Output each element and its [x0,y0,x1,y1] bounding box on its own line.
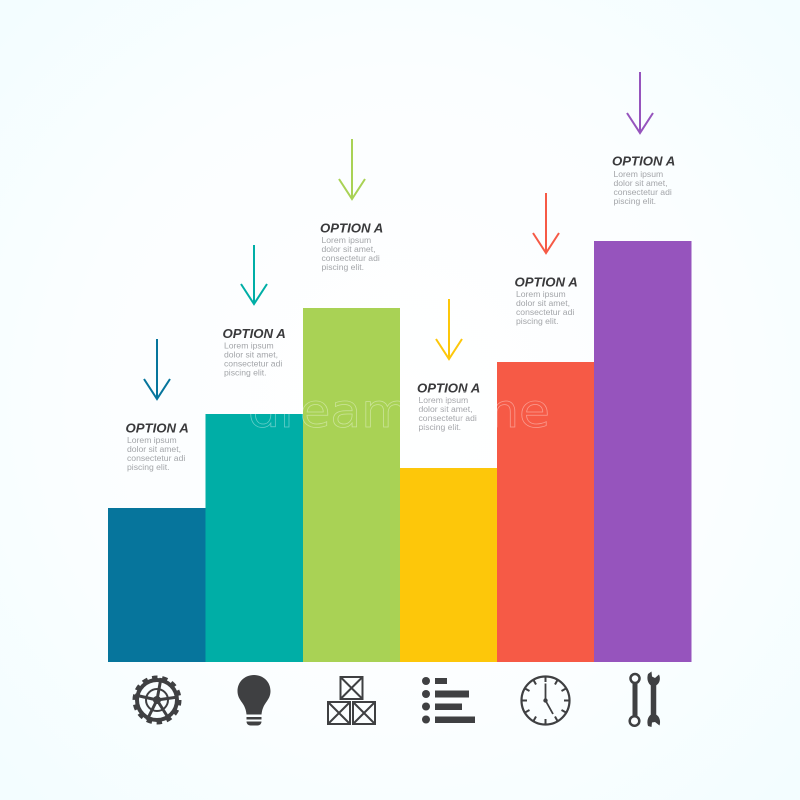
arrow: blue [144,339,170,399]
text block: option 4: consectetur adi [418,413,477,423]
text block: option 6: dolor sit amet, [614,178,667,188]
text block: option 5 [514,274,578,326]
text block: option 2: piscing elit. [224,368,267,378]
text block: option 1: piscing elit. [127,462,170,472]
text block: option 4: piscing elit. [418,422,461,432]
icon: list [422,677,475,724]
text block: option 2: OPTION A [222,326,286,341]
text block: option 2: consectetur adi [224,358,282,368]
text block: option 6: OPTION A [612,154,675,168]
text block: option 6: Lorem ipsum [614,169,663,179]
text block: option 2 [222,326,286,378]
watermark: dreamstime [248,384,550,438]
text block: option 2: dolor sit amet, [224,350,278,360]
text block: option 4: dolor sit amet, [418,404,472,414]
arrow: teal [241,245,267,304]
icon: gear [134,677,180,723]
text block: option 5: piscing elit. [516,316,559,326]
text block: option 5: OPTION A [514,274,578,290]
text block: option 3: dolor sit amet, [322,244,375,254]
text block: option 5: consectetur adi [516,307,574,317]
text block: option 1 [126,420,189,472]
icon: wrenches [630,672,660,727]
text block: option 6: consectetur adi [614,187,672,197]
text block: option 4: OPTION A [417,380,480,396]
arrow: red [533,193,559,253]
text block: option 3: piscing elit. [322,262,364,272]
text block: option 1: Lorem ipsum [127,435,177,445]
text block: option 3: OPTION A [320,220,383,236]
text block: option 1: consectetur adi [127,453,185,463]
arrow: yellow [436,299,462,359]
icon: light bulb [238,675,270,726]
arrow: purple [627,72,653,133]
text block: option 4: Lorem ipsum [418,395,468,405]
bar chart [108,241,692,662]
arrow: green [339,139,365,199]
icon: clock [522,676,570,724]
text block: option 2: Lorem ipsum [224,340,274,350]
text block: option 3 [320,220,383,272]
text block: option 1: dolor sit amet, [127,444,181,454]
text block: option 3: Lorem ipsum [322,235,371,245]
text block: option 1: OPTION A [126,420,189,436]
icon: boxes [328,677,375,724]
text block: option 6: piscing elit. [614,196,656,206]
text block: option 5: Lorem ipsum [516,289,566,299]
text block: option 4 [417,380,480,432]
text block: option 3: consectetur adi [322,253,380,263]
text block: option 5: dolor sit amet, [516,298,570,308]
text block: option 6 [612,154,675,206]
